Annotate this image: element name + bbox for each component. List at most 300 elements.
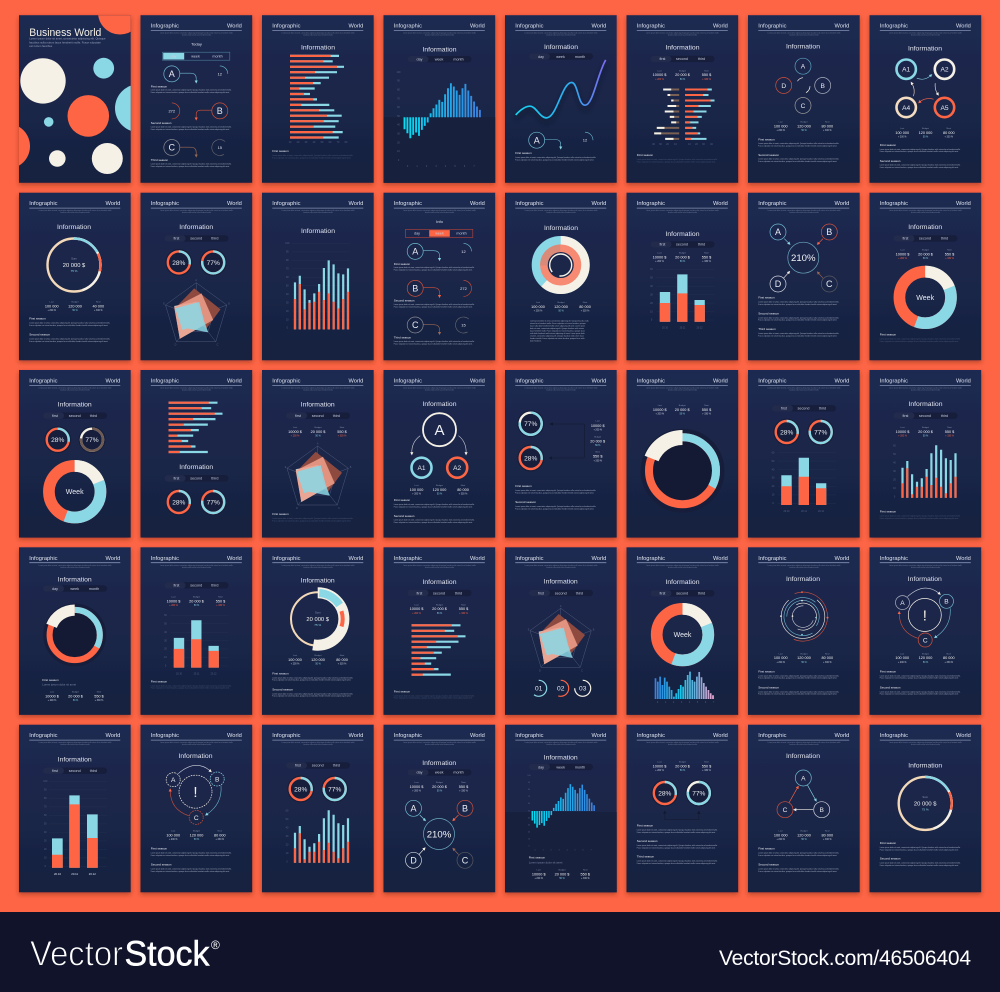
stats: + 200 % — [291, 435, 299, 437]
stats — [653, 404, 712, 416]
stats: + 200 % — [898, 662, 906, 664]
chart axis: 30 — [659, 143, 662, 146]
stats: + 200 % — [48, 700, 56, 702]
header — [272, 24, 363, 37]
gauge 12: 12 — [461, 249, 466, 254]
column chart: 20.12 — [818, 510, 825, 513]
tabs — [772, 405, 836, 412]
stats: Last — [900, 127, 905, 130]
column chart: 40 — [772, 468, 775, 471]
stats: Budget — [801, 830, 808, 833]
donut chart — [657, 609, 708, 660]
first season text: First season — [272, 671, 289, 675]
tabs: second — [676, 243, 688, 247]
column chart: 60 — [286, 809, 289, 812]
header: faucibus nulla rutrum lacus hendrerit mollis — [668, 566, 697, 569]
stats: 50 % — [680, 79, 685, 81]
histogram: 20 — [528, 831, 531, 833]
first season text — [394, 262, 475, 272]
stats: 10000 $ — [653, 408, 668, 412]
stats: Last — [657, 69, 662, 72]
heading: Information — [58, 757, 92, 764]
stats — [774, 830, 833, 841]
heading: Information — [301, 577, 335, 584]
column chart: 20 — [164, 648, 167, 651]
ring chart: 75 % — [922, 807, 929, 811]
stats — [531, 301, 591, 313]
header: Lorem ipsum dolor sit amet, consectetur adipiscing elit quisque faucibus nulla rutrum lacus hendrerit mollis — [768, 386, 841, 390]
histogram axis: 6 — [464, 165, 466, 168]
first season text: Fusce vulputate est rutrum faucibus, quisque lacus nulla dolor hendrerit mollis rutrum adipiscing elit amet. — [394, 505, 473, 508]
header: faucibus nulla rutrum lacus hendrerit mollis — [182, 211, 211, 214]
heading: Information — [58, 576, 92, 583]
cover intro text: faucibus nulla rutrum lacus hendrerit mollis. Fusce vulputate — [29, 40, 101, 44]
gauge 12 — [212, 66, 228, 82]
first season text: Fusce vulputate est rutrum faucibus, quisque lacus nulla dolor hendrerit mollis rutrum adipiscing elit amet. — [880, 517, 959, 520]
histogram axis: 10 — [397, 150, 400, 153]
tabs: second — [676, 57, 688, 61]
card: nested donut — [505, 193, 617, 360]
header — [637, 201, 728, 214]
header: Lorem ipsum dolor sit amet, consectetur adipiscing elit quisque faucibus nulla rutrum lacus hendrerit mollis — [646, 209, 719, 212]
stats: + 200 % — [47, 310, 56, 312]
connector arrows — [552, 424, 584, 458]
tabs: first — [538, 591, 544, 595]
stats: Next — [96, 300, 101, 303]
tabs: second — [919, 237, 931, 241]
tabs: third — [333, 764, 340, 768]
first season text — [394, 498, 475, 508]
tabs — [286, 762, 350, 769]
tabs: third — [941, 237, 948, 241]
tabs — [408, 769, 472, 776]
paragraph: lacus nulla dolor hendrerit mollis rutrum adipiscing elit amet. Lorem ipsum — [530, 325, 586, 328]
stats: 120 000 — [190, 834, 203, 838]
card: four node ring — [748, 15, 860, 183]
stats: Budget — [559, 869, 566, 872]
header: faucibus nulla rutrum lacus hendrerit mollis — [60, 743, 90, 746]
tabs: first — [52, 769, 58, 773]
chart axis: 60 — [329, 141, 332, 144]
cycle diagram: C — [923, 637, 928, 644]
header: Infographic — [880, 24, 908, 30]
stats: + 330 % — [702, 261, 711, 263]
stats: 50 % — [801, 662, 807, 664]
hub diagram: A — [775, 227, 781, 237]
stats: 20 000 $ — [918, 430, 934, 434]
side stats: + 200 % — [593, 430, 602, 432]
radar chart: E — [528, 628, 530, 631]
tabs: third — [698, 57, 705, 61]
line chart — [516, 60, 606, 122]
stats: 20 000 $ — [555, 873, 570, 877]
tabs: first — [903, 414, 908, 418]
stats: 100 000 — [774, 834, 788, 838]
wedge ring chart: 75 % — [314, 623, 321, 627]
stats: + 330 % — [459, 494, 467, 496]
second season text: Lorem ipsum dolor sit amet, consectetur adipiscing elit. Quisque faucibus nulla rutrum lacus hendrerit mollis. — [272, 692, 354, 695]
tabs: month — [453, 771, 464, 775]
second season text: Fusce vulputate est rutrum faucibus, quisque lacus nulla dolor hendrerit mollis rutrum adipiscing elit amet. — [758, 870, 838, 873]
header: Infographic — [880, 733, 908, 739]
stats: 20 000 $ — [675, 408, 690, 412]
heading: Information — [908, 763, 942, 770]
stats: 20 000 $ — [432, 785, 448, 789]
header — [151, 556, 242, 569]
ring chart: 20 000 $ — [914, 801, 937, 807]
column chart: 30 — [164, 639, 167, 642]
header: Infographic — [880, 201, 908, 207]
second season text: Lorem ipsum dolor sit amet, consectetur adipiscing elit. Quisque faucibus nulla rutrum lacus hendrerit mollis. — [758, 868, 840, 871]
second season text — [880, 857, 961, 867]
header: faucibus nulla rutrum lacus hendrerit mollis — [911, 211, 940, 214]
heading: Information — [786, 44, 820, 51]
header: Lorem ipsum dolor sit amet, consectetur adipiscing elit quisque faucibus nulla rutrum lacus hendrerit mollis — [39, 209, 112, 212]
header — [515, 24, 606, 37]
header: faucibus nulla rutrum lacus hendrerit mollis — [60, 388, 90, 392]
first season text: Lorem ipsum dolor sit amet, consectetur adipiscing elit. Quisque faucibus nulla rutrum lacus hendrerit mollis. — [272, 154, 354, 157]
header: Lorem ipsum dolor sit amet, consectetur adipiscing elit quisque faucibus nulla rutrum lacus hendrerit mollis — [889, 741, 962, 744]
stats: + 330 % — [702, 770, 711, 772]
first season text: Lorem ipsum dolor sit amet, consectetur adipiscing elit. Quisque faucibus nulla rutrum lacus hendrerit mollis. — [394, 266, 475, 269]
second season text — [758, 685, 840, 696]
paragraph: lacus hendrerit mollis. Fusce vulputate est rutrum faucibus, quisque lacus — [530, 330, 585, 333]
stats: 100 000 — [45, 304, 59, 308]
header: Infographic — [272, 556, 301, 562]
donut 77 percent — [807, 418, 834, 446]
donut 28 percent — [773, 418, 800, 446]
column chart: 40 — [650, 285, 653, 288]
gauge 15: 15 — [461, 322, 466, 327]
column chart: 40 — [286, 293, 289, 296]
card: today flow — [140, 15, 252, 183]
tab selector: week — [435, 232, 444, 236]
second season text: Second season — [637, 839, 658, 843]
column chart: 90 — [286, 251, 289, 254]
first season text — [29, 317, 111, 327]
column chart: 30 — [44, 840, 47, 843]
radar chart: E — [285, 466, 287, 469]
dashed cycle diagram: ! — [193, 784, 198, 801]
second season text: Fusce vulputate est rutrum faucibus, quisque lacus nulla dolor hendrerit mollis rutrum adipiscing elit amet. — [637, 847, 716, 850]
stats: Next — [825, 121, 830, 124]
triangle diagram — [777, 770, 830, 818]
tabs: second — [190, 237, 202, 241]
first season text: First season — [272, 512, 289, 516]
header: World — [227, 24, 242, 30]
stats: Next — [583, 869, 588, 872]
header — [637, 556, 728, 569]
stats: Next — [704, 251, 709, 254]
first season text: Lorem ipsum dolor sit amet, consectetur adipiscing elit. Quisque faucibus nulla rutrum lacus hendrerit mollis. — [394, 694, 475, 697]
header: World — [956, 201, 971, 207]
stats — [166, 830, 226, 841]
first season text — [515, 484, 597, 494]
second season text: Second season — [880, 857, 901, 861]
first season text: First season — [758, 847, 775, 851]
column chart: 40 — [893, 461, 896, 464]
histogram axis: 20 — [397, 141, 400, 144]
tabs: week — [435, 57, 443, 61]
first season text: Lorem ipsum dolor sit amet, consectetur adipiscing elit. Quisque faucibus nulla rutrum lacus hendrerit mollis. — [758, 301, 840, 304]
heading: Information — [179, 464, 213, 471]
radar chart: B — [593, 628, 595, 631]
header: World — [713, 24, 728, 30]
first season text: Fusce vulputate est rutrum faucibus, quisque lacus nulla dolor hendrerit mollis rutrum adipiscing elit amet. — [272, 519, 352, 522]
chart axis: 40 — [313, 141, 316, 144]
header: faucibus nulla rutrum lacus hendrerit mollis — [303, 566, 333, 569]
stats: + 330 % — [945, 662, 953, 664]
stats: 120 000 — [797, 124, 811, 128]
histogram: 70 — [528, 796, 531, 798]
heading: Information — [57, 224, 91, 231]
orbit diagram — [772, 585, 834, 648]
paragraph: nulla dolor hendrerit mollis rutrum adipiscing elit amet. Lorem ipsum dolor — [530, 332, 585, 335]
cycle diagram: A — [900, 600, 905, 607]
second season text: Second season — [151, 863, 172, 867]
column chart — [772, 451, 836, 513]
dashed cycle diagram: C — [194, 815, 199, 822]
paragraph: hendrerit mollis. Fusce vulputate est rutrum faucibus, quisque lacus nulla — [530, 337, 584, 340]
card: exclamation cycle — [870, 547, 981, 715]
stats — [774, 121, 833, 132]
first season text — [758, 847, 840, 857]
third season text — [151, 158, 232, 168]
header — [880, 378, 971, 392]
stats: Next — [825, 830, 830, 833]
second season text: Fusce vulputate est rutrum faucibus, quisque lacus nulla dolor hendrerit mollis rutrum adipiscing elit amet. — [29, 340, 109, 343]
header: World — [470, 733, 485, 739]
histogram: 60 — [528, 803, 531, 805]
dashed cycle diagram: A — [171, 777, 176, 784]
node diagram: C — [801, 103, 806, 110]
stats: 50 % — [194, 605, 199, 607]
column chart: 20 — [893, 478, 896, 481]
stats: 550 $ — [702, 73, 712, 77]
header — [758, 556, 849, 569]
donut 28 percent: 28% — [172, 499, 186, 506]
header: World — [349, 378, 363, 384]
stats: Budget — [679, 404, 686, 407]
header: faucibus nulla rutrum lacus hendrerit mollis — [425, 743, 454, 746]
column chart: 50 — [286, 818, 289, 821]
histogram: 3 — [558, 850, 560, 852]
column chart: 20.12 — [211, 673, 217, 676]
stats: Next — [461, 603, 466, 606]
header: Lorem ipsum dolor sit amet, consectetur adipiscing elit quisque faucibus nulla rutrum lacus hendrerit mollis — [646, 386, 719, 390]
second season text — [758, 863, 840, 873]
header: Infographic — [637, 733, 665, 739]
histogram: 1 — [665, 701, 667, 704]
first season text: Lorem ipsum dolor sit amet, consectetur adipiscing elit. Quisque faucibus nulla rutrum lacus hendrerit mollis. — [880, 846, 961, 849]
header: Infographic — [29, 733, 58, 739]
stats: 50 % — [923, 258, 928, 260]
ring chart — [899, 777, 952, 830]
stats: + 200 % — [655, 770, 664, 772]
header: World — [835, 201, 849, 207]
header: Lorem ipsum dolor sit amet, consectetur adipiscing elit quisque faucibus nulla rutrum lacus hendrerit mollis — [282, 741, 355, 744]
stats: + 200 % — [412, 613, 421, 615]
column chart: 20.12 — [89, 872, 96, 876]
donut 77 percent — [517, 410, 544, 437]
header: Infographic — [637, 24, 665, 30]
header: World — [106, 733, 120, 739]
tabs — [164, 582, 228, 588]
heading: Information — [665, 231, 700, 238]
side stats: 10000 $ — [591, 424, 605, 428]
header: Infographic — [394, 201, 422, 207]
stats: + 330 % — [945, 137, 953, 139]
chart axis: 20 — [297, 141, 300, 144]
column chart: 50 — [44, 823, 47, 826]
second season text: Fusce vulputate est rutrum faucibus, quisque lacus nulla dolor hendrerit mollis rutrum adipiscing elit amet. — [515, 507, 595, 510]
header: Lorem ipsum dolor sit amet, consectetur adipiscing elit quisque faucibus nulla rutrum lacus hendrerit mollis — [525, 386, 598, 390]
card: 210 percent hub — [748, 193, 860, 360]
stats: Budget — [72, 300, 79, 303]
donut 28 percent: 28% — [780, 429, 793, 436]
header: Lorem ipsum dolor sit amet, consectetur adipiscing elit quisque faucibus nulla rutrum lacus hendrerit mollis — [160, 32, 233, 35]
column chart: 0 — [651, 319, 653, 322]
donut 77 percent — [321, 776, 348, 802]
stats: + 200 % — [656, 413, 664, 415]
donut 28 percent — [165, 488, 192, 516]
stats: + 200 % — [776, 130, 785, 132]
card: tall column chart — [19, 725, 131, 892]
column chart: 10 — [286, 318, 289, 321]
stats: 550 $ — [581, 873, 591, 877]
donut 28 percent: 28% — [524, 455, 537, 462]
tabs — [43, 412, 107, 419]
radar chart — [285, 442, 352, 510]
column chart: 80 — [286, 259, 289, 262]
gauge 02 — [553, 680, 569, 696]
tabs: first — [781, 407, 787, 411]
footer url: VectorStock.com/46506404 — [719, 947, 971, 970]
header: Lorem ipsum dolor sit amet, consectetur adipiscing elit quisque faucibus nulla rutrum lacus hendrerit mollis — [889, 32, 962, 35]
header: World — [592, 201, 606, 207]
lower band — [384, 117, 495, 183]
header: Lorem ipsum dolor sit amet, consectetur adipiscing elit quisque faucibus nulla rutrum lacus hendrerit mollis — [768, 564, 841, 567]
first season text — [515, 151, 597, 161]
donut chart — [899, 272, 951, 323]
histogram — [404, 83, 480, 138]
ring chart: 75 % — [71, 269, 78, 273]
heading: Information — [301, 228, 335, 235]
donut 28 percent — [165, 249, 192, 276]
histogram axis: 70 — [397, 97, 400, 100]
stats: Last — [293, 426, 297, 429]
first season text — [42, 678, 76, 686]
tabs: third — [90, 769, 97, 773]
donut 77 percent: 77% — [692, 790, 706, 797]
stats: Next — [704, 404, 709, 407]
stats — [653, 251, 712, 263]
column chart: 60 — [650, 268, 653, 271]
tabs — [286, 412, 350, 419]
stats — [896, 426, 955, 438]
header: Infographic — [151, 201, 179, 207]
triangle diagram: A — [801, 775, 806, 782]
histogram: 80 — [528, 789, 531, 791]
stats: 80 000 — [457, 488, 469, 492]
gauge 12 — [577, 132, 593, 148]
histogram: 100 — [527, 775, 532, 777]
header: Lorem ipsum dolor sit amet, consectetur adipiscing elit quisque faucibus nulla rutrum lacus hendrerit mollis — [160, 564, 233, 567]
gauge 15 — [453, 314, 474, 336]
header: World — [835, 556, 849, 562]
first season text: First season — [758, 669, 775, 673]
first season text — [272, 149, 354, 160]
tabs: third — [211, 584, 218, 588]
header: Lorem ipsum dolor sit amet, consectetur adipiscing elit quisque faucibus nulla rutrum lacus hendrerit mollis — [403, 386, 476, 390]
flow B: B — [412, 284, 418, 294]
stats: 80 000 — [943, 131, 955, 135]
flow A — [164, 66, 196, 82]
histogram: 4 — [566, 850, 568, 852]
second season text: Lorem ipsum dolor sit amet, consectetur adipiscing elit. Quisque faucibus nulla rutrum lacus hendrerit mollis. — [29, 338, 111, 341]
header: faucibus nulla rutrum lacus hendrerit mollis — [303, 34, 333, 37]
stats: + 330 % — [702, 79, 711, 81]
second season text: Fusce vulputate est rutrum faucibus, quisque lacus nulla dolor hendrerit mollis rutrum adipiscing elit amet. — [151, 870, 230, 873]
stats: 120 000 — [919, 131, 932, 135]
third season text: Lorem ipsum dolor sit amet, consectetur adipiscing elit. Quisque faucibus nulla rutrum lacus hendrerit mollis. — [637, 860, 718, 863]
header — [515, 556, 606, 569]
column chart: 60 — [772, 451, 775, 454]
header: Lorem ipsum dolor sit amet, consectetur adipiscing elit quisque faucibus nulla rutrum lacus hendrerit mollis — [889, 564, 962, 567]
stats: + 330 % — [459, 613, 468, 615]
side stats — [590, 420, 606, 462]
second season text — [151, 863, 232, 873]
stats: Next — [583, 301, 588, 304]
header: World — [349, 24, 363, 30]
header — [758, 24, 849, 37]
histogram: 4 — [689, 701, 691, 704]
second season text: Second season — [272, 687, 293, 691]
header: Lorem ipsum dolor sit amet, consectetur adipiscing elit quisque faucibus nulla rutrum lacus hendrerit mollis — [646, 741, 719, 744]
stats — [410, 484, 469, 496]
gauge 15: 15 — [218, 145, 223, 150]
second season text — [758, 312, 840, 322]
footer logo: Vector — [30, 935, 123, 974]
gauge 01 — [531, 680, 547, 696]
tabs — [650, 590, 714, 596]
first season text — [880, 333, 961, 343]
column chart: 20 — [772, 485, 775, 488]
radar chart: C — [581, 669, 583, 672]
first season text: Fusce vulputate est rutrum faucibus, quisque lacus nulla dolor hendrerit mollis rutrum adipiscing elit amet. — [637, 831, 716, 834]
first season text — [637, 824, 718, 834]
stats: + 330 % — [823, 839, 832, 841]
column chart: 10 — [650, 310, 653, 313]
horizontal bar chart — [412, 625, 466, 675]
stats: Budget — [193, 596, 200, 599]
second season text: Second season — [758, 863, 779, 867]
ring chart — [48, 238, 100, 292]
column chart: 20.10 — [662, 327, 669, 330]
stats: 550 $ — [702, 408, 712, 412]
radar chart: A — [560, 605, 562, 608]
donut 28 percent — [287, 776, 314, 802]
second season text: Second season — [758, 312, 779, 316]
column chart: 20 — [286, 843, 289, 846]
header: Lorem ipsum dolor sit amet, consectetur adipiscing elit quisque faucibus nulla rutrum lacus hendrerit mollis — [282, 564, 355, 567]
hub diagram — [770, 224, 837, 292]
column chart — [43, 780, 107, 876]
column chart: 20 — [650, 302, 653, 305]
stats: 20 000 $ — [675, 765, 691, 769]
node diagram: A — [801, 63, 806, 70]
column chart: 0 — [165, 665, 167, 668]
